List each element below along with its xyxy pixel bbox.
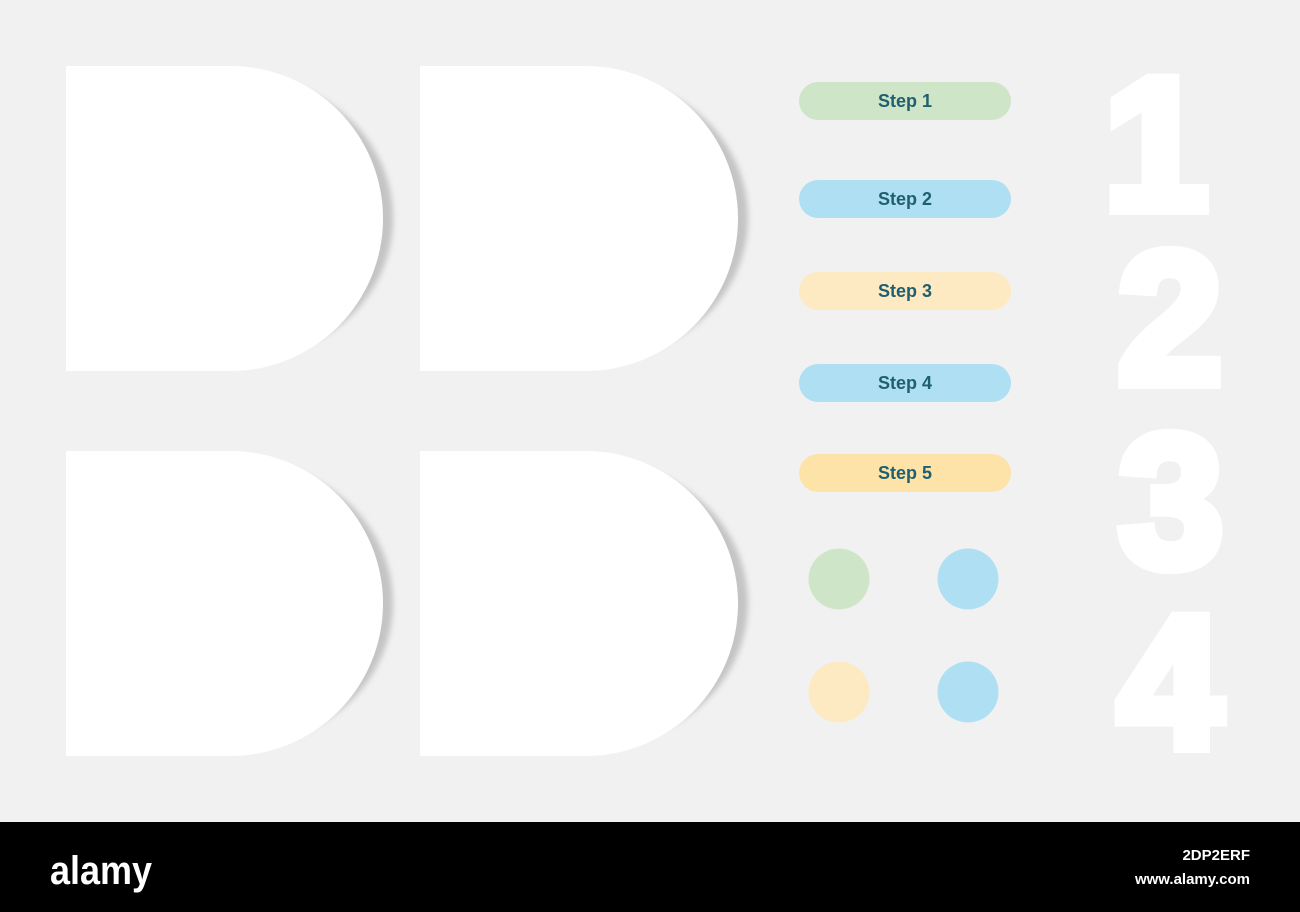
numbers 1-4: 2 [1118,213,1222,423]
footer bar: alamy [50,849,153,893]
footer bar: 2DP2ERF [1182,847,1250,864]
pill: Step 1 [799,82,1011,120]
panel: D shape top-left [66,66,393,371]
pill: Step 2: Step 2 [878,189,932,209]
footer bar: www.alamy.com [1134,871,1250,888]
numbers 1-4: 4 [1118,577,1222,787]
footer bar [0,822,1300,912]
dots: colored circles [808,548,998,722]
numbers 1-4: 3 [1119,396,1223,606]
pill: Step 2 [799,180,1011,218]
pill: Step 4: Step 4 [878,373,932,393]
pill: Step 5: Step 5 [878,463,932,483]
panel: D shape bottom-right [420,451,748,756]
numbers 1-4 [1104,39,1223,787]
pill: Step 4 [799,364,1011,402]
pill: Step 1: Step 1 [878,91,932,111]
pill: Step 5 [799,454,1011,492]
pill: Step 3: Step 3 [878,281,932,301]
pill: Step 3 [799,272,1011,310]
panel: D shape bottom-left [66,451,393,756]
panel: D shape top-right [420,66,748,371]
numbers 1-4: 1 [1104,39,1208,249]
